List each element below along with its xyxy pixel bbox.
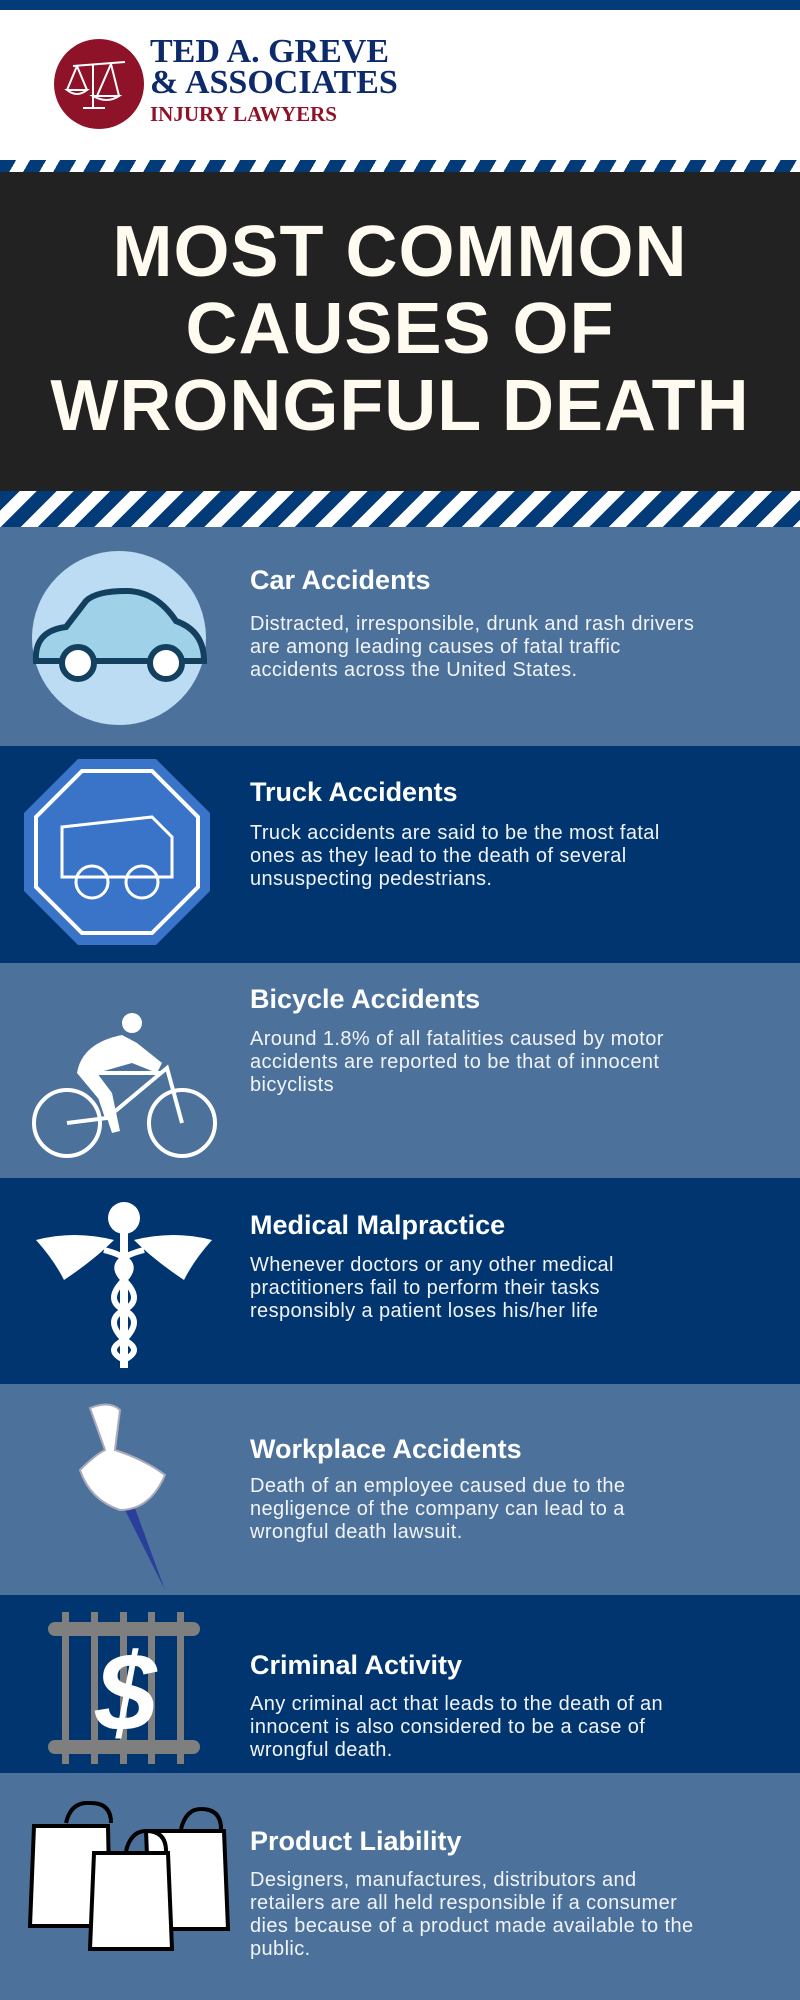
logo text: TED A. GREVE: [150, 33, 389, 70]
icon: cyclist: [32, 1013, 217, 1158]
panel: bicycle accidents: [0, 963, 800, 1178]
icon: jail dollar: $: [94, 1631, 158, 1754]
title: MOST COMMON: [113, 212, 687, 292]
text: bicyclists: [250, 1074, 334, 1096]
icon: shopping bags: [28, 1801, 230, 1951]
panel: medical malpractice: [0, 1178, 800, 1384]
text: [250, 1693, 663, 1761]
panel: product liability: [0, 1773, 800, 2000]
heading: Product Liability: [250, 1826, 462, 1856]
text: wrongful death lawsuit.: [250, 1521, 463, 1543]
text: wrongful death.: [250, 1739, 393, 1761]
text: Truck accidents are said to be the most fatal: [250, 822, 660, 844]
title: [50, 212, 750, 446]
heading: Bicycle Accidents: [250, 984, 480, 1014]
text: Distracted, irresponsible, drunk and rash drivers: [250, 613, 694, 635]
heading: Car Accidents: [250, 565, 431, 595]
text: Around 1.8% of all fatalities caused by motor: [250, 1028, 664, 1050]
text: dies because of a product made available to the: [250, 1915, 694, 1937]
text: Designers, manufactures, distributors and: [250, 1869, 637, 1891]
panel: truck accidents: [0, 746, 800, 963]
text: are among leading causes of fatal traffic: [250, 636, 621, 658]
top bar: [0, 0, 800, 10]
logo text: & ASSOCIATES: [150, 64, 398, 101]
heading: Medical Malpractice: [250, 1210, 505, 1240]
text: [250, 1869, 694, 1960]
text: [250, 1475, 625, 1543]
heading: Criminal Activity: [250, 1650, 462, 1680]
text: retailers are all held responsible if a consumer: [250, 1892, 677, 1914]
text: innocent is also considered to be a case of: [250, 1716, 645, 1738]
icon: caduceus: [36, 1202, 212, 1368]
heading: Truck Accidents: [250, 777, 458, 807]
header: logo: [0, 10, 800, 160]
panel: workplace accidents: [0, 1384, 800, 1595]
logo text: [150, 33, 398, 101]
text: Death of an employee caused due to the: [250, 1475, 625, 1497]
text: responsibly a patient loses his/her life: [250, 1300, 598, 1322]
panel: criminal activity: [0, 1595, 800, 1773]
text: accidents across the United States.: [250, 659, 578, 681]
header: logo: INJURY LAWYERS: [150, 102, 337, 126]
icon: pushpin: [78, 1404, 166, 1590]
text: Whenever doctors or any other medical: [250, 1254, 614, 1276]
logo emblem: [54, 39, 144, 129]
title: CAUSES OF: [185, 289, 615, 369]
text: practitioners fail to perform their tasks: [250, 1277, 600, 1299]
stripe top: [0, 160, 800, 172]
title: WRONGFUL DEATH: [50, 366, 750, 446]
text: [250, 1028, 664, 1096]
text: unsuspecting pedestrians.: [250, 868, 492, 890]
title panel: [0, 172, 800, 491]
text: [250, 822, 660, 890]
text: negligence of the company can lead to a: [250, 1498, 625, 1520]
text: ones as they lead to the death of several: [250, 845, 627, 867]
text: Any criminal act that leads to the death of an: [250, 1693, 663, 1715]
heading: Workplace Accidents: [250, 1434, 522, 1464]
text: accidents are reported to be that of innocent: [250, 1051, 659, 1073]
text: [250, 1254, 614, 1322]
stripe bottom: [0, 491, 800, 527]
icon: car: [32, 551, 207, 725]
panel: car accidents: [0, 527, 800, 746]
text: public.: [250, 1938, 311, 1960]
text: [250, 613, 694, 681]
icon: jail dollar: [48, 1612, 200, 1764]
icon: truck sign: [24, 759, 210, 945]
